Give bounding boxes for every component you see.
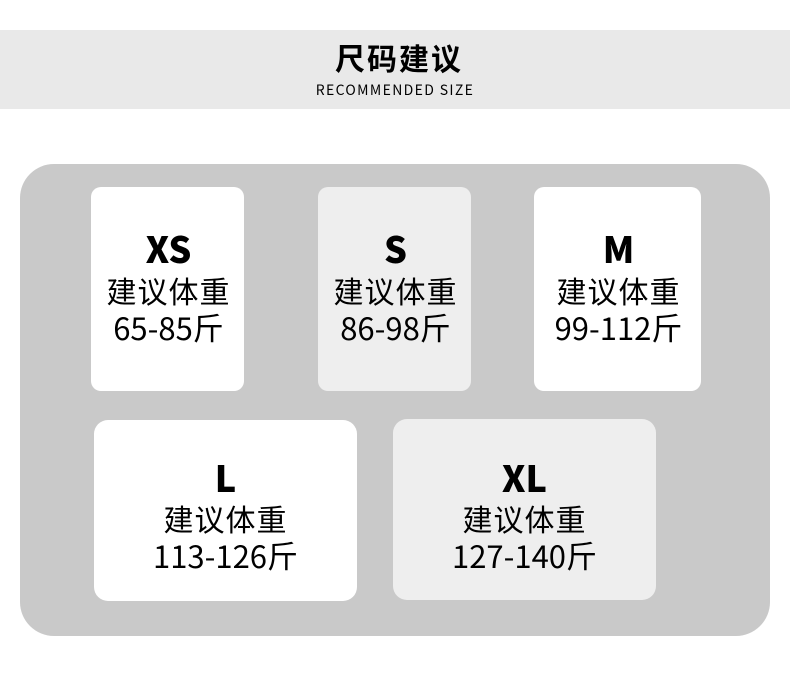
- panel: size recommendations: [20, 164, 770, 636]
- card: XS: 65-85斤: [113, 304, 224, 349]
- card: XL: XL: [502, 451, 547, 503]
- card: XL: 建议体重: [462, 496, 586, 540]
- card: L: 113-126斤: [153, 532, 298, 577]
- card: S: 建议体重: [334, 268, 458, 312]
- card: S: 86-98斤: [340, 304, 451, 349]
- card: XS: 建议体重: [106, 268, 230, 312]
- card: L: [94, 420, 357, 601]
- card: L: 建议体重: [164, 496, 288, 540]
- card: M: 建议体重: [556, 268, 680, 312]
- card: S: S: [384, 222, 407, 274]
- card: S: [318, 187, 471, 391]
- card: M: [534, 187, 701, 391]
- card: XS: [91, 187, 244, 391]
- header band: [0, 30, 790, 109]
- title: 尺码建议: [335, 35, 463, 79]
- card: M: M: [603, 222, 634, 274]
- subtitle: RECOMMENDED SIZE: [316, 80, 474, 100]
- card: XL: [393, 419, 656, 600]
- card: XS: XS: [146, 222, 191, 274]
- card: L: L: [215, 451, 236, 503]
- card: M: 99-112斤: [555, 304, 682, 349]
- card: XL: 127-140斤: [452, 532, 597, 577]
